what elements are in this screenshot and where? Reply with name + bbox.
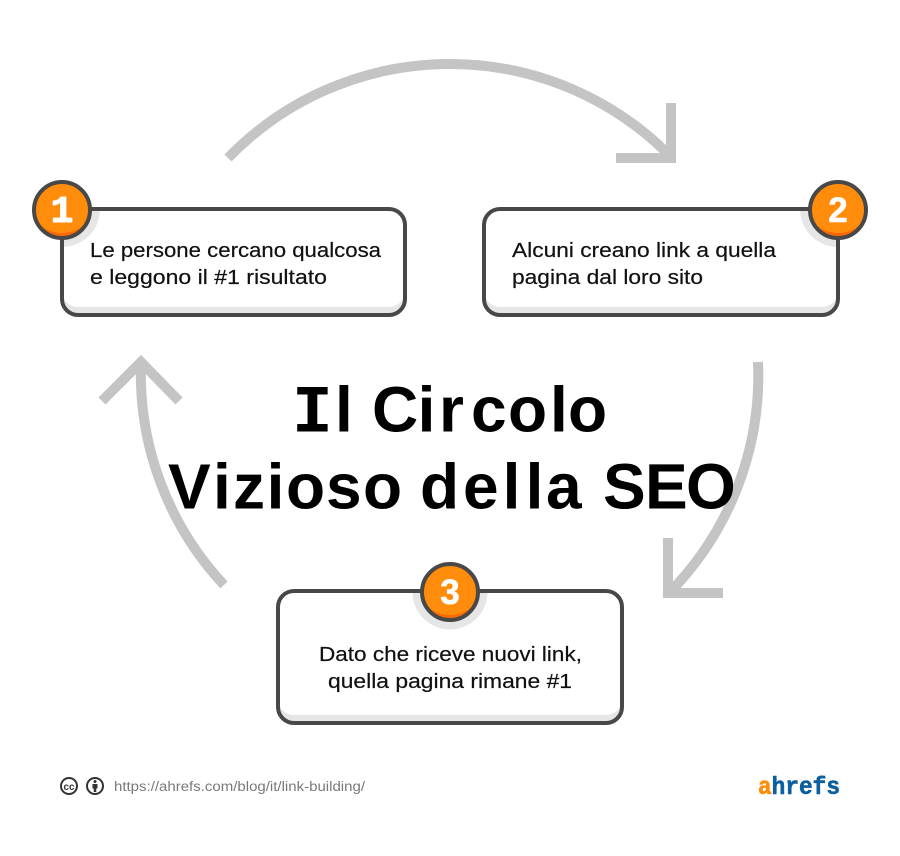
title: i xyxy=(213,450,231,522)
step 1 text xyxy=(90,239,382,289)
step 3 number badge xyxy=(422,564,478,620)
panel: step 3 xyxy=(278,564,622,723)
step 2 number badge xyxy=(810,182,866,238)
title: z xyxy=(233,450,265,522)
title: l xyxy=(503,450,520,522)
title: i xyxy=(418,374,435,446)
title: l xyxy=(335,374,353,446)
title xyxy=(168,374,736,522)
title: l xyxy=(550,374,568,446)
title: d xyxy=(420,450,459,522)
title: r xyxy=(439,374,464,446)
title: V xyxy=(168,450,211,522)
step 2 text xyxy=(512,239,777,289)
arrow: top, step 1 to step 2 xyxy=(228,64,676,163)
arrow: right, step 2 to step 3 xyxy=(663,362,758,598)
logo: ahrefs: ahrefs xyxy=(758,773,840,802)
title: e xyxy=(463,450,499,522)
source url: https://ahrefs.com/blog/it/link-building/ xyxy=(114,779,365,794)
icon: creative commons xyxy=(61,778,77,794)
icon: attribution xyxy=(87,778,103,794)
step 2 number badge: 2 xyxy=(828,191,848,230)
step 3 number badge: 3 xyxy=(440,573,460,612)
title: o xyxy=(568,374,607,446)
title: i xyxy=(267,450,284,522)
icon: creative commons: cc xyxy=(64,782,75,793)
panel: step 1 xyxy=(34,182,405,315)
step 2 text: Alcuni creano link a quella xyxy=(512,239,777,262)
panel: step 2 xyxy=(484,182,866,315)
title: o xyxy=(286,450,325,522)
title: C xyxy=(372,374,418,446)
title: s xyxy=(326,450,362,522)
title: o xyxy=(363,450,402,522)
title: o xyxy=(508,374,547,446)
step 1 number badge: 1 xyxy=(51,191,73,234)
title: O xyxy=(686,450,736,522)
title: a xyxy=(546,450,582,522)
title: I xyxy=(292,376,333,452)
title: c xyxy=(471,374,507,446)
arrow: left, step 3 to step 1 xyxy=(102,362,224,585)
step 1 number badge xyxy=(34,182,90,238)
step 1 text: Le persone cercano qualcosa xyxy=(90,239,382,262)
step 2 text: pagina dal loro sito xyxy=(512,266,703,289)
title: l xyxy=(526,450,543,522)
title: E xyxy=(645,450,688,522)
step 1 text: e leggono il #1 risultato xyxy=(90,266,327,289)
step 3 text: quella pagina rimane #1 xyxy=(328,670,572,693)
title: S xyxy=(603,450,646,522)
step 3 text xyxy=(319,643,582,693)
step 3 text: Dato che riceve nuovi link, xyxy=(319,643,582,666)
